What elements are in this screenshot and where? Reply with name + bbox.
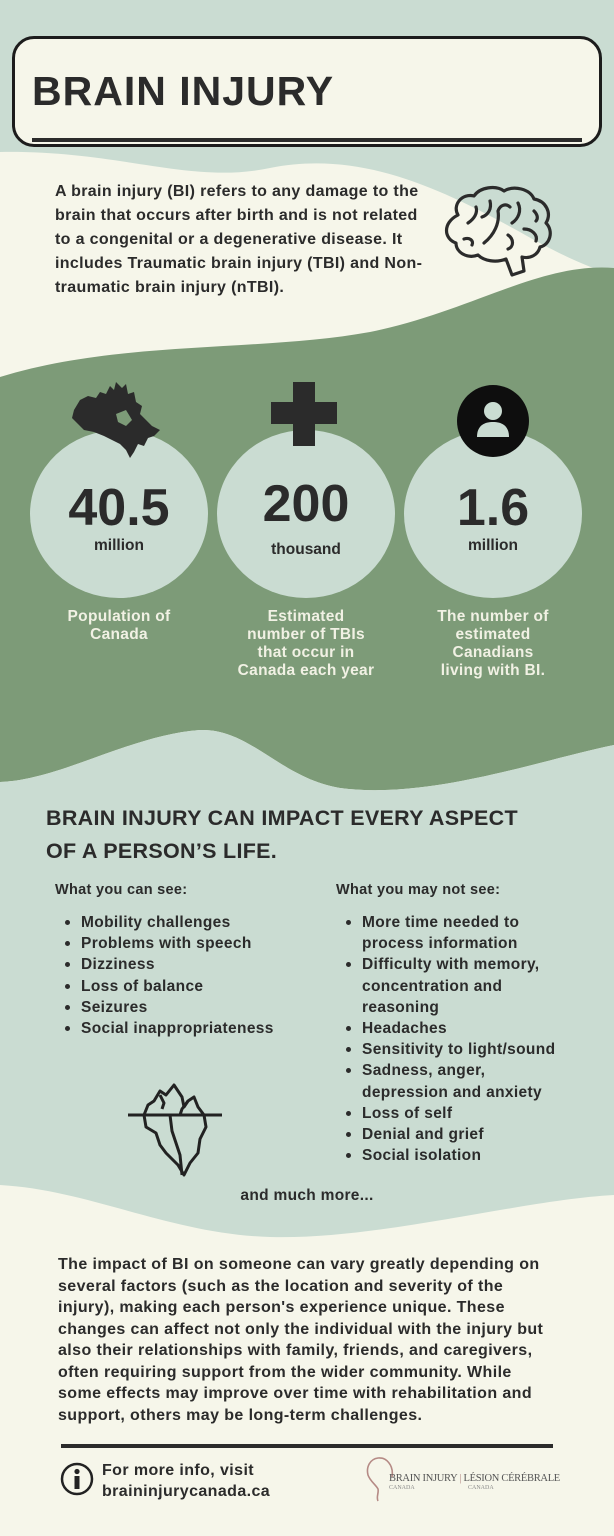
intro text: to a congenital or a degenerative disease. It (55, 231, 402, 248)
icon: canada map (72, 382, 160, 458)
section heading: BRAIN INJURY CAN IMPACT EVERY ASPECT (46, 806, 518, 830)
logo: CANADA (389, 1485, 415, 1491)
stat: living with BI: million (468, 537, 518, 554)
list: what you can see: Dizziness (81, 956, 155, 973)
footer info: braininjurycanada.ca (102, 1483, 270, 1500)
icon: plus (271, 382, 337, 446)
stat: TBIs: that occur in (258, 644, 354, 661)
stat: TBIs (217, 382, 395, 679)
icon: brain (444, 186, 552, 277)
list: what you can see: Mobility challenges (81, 914, 231, 931)
closing paragraph: often requiring support from the wider community. While (58, 1364, 512, 1380)
icon: person (457, 385, 529, 457)
title box (12, 36, 602, 147)
closing paragraph: support, others may be long-term challenges. (58, 1406, 422, 1424)
icon: iceberg (128, 1083, 222, 1177)
list: what you may not see: process information (362, 935, 518, 952)
list: what you can see: Problems with speech (81, 935, 252, 952)
list: what you may not see: Difficulty with memory, (362, 956, 539, 973)
number: 40.5 (68, 479, 170, 537)
label: Population of (68, 608, 170, 625)
stat: TBIs: number of TBIs (247, 626, 365, 643)
stat: TBIs: thousand (271, 541, 341, 558)
list: what you may not see: Denial and grief (362, 1126, 484, 1143)
footer info: For more info, visit (102, 1462, 254, 1479)
stat: living with BI: estimated (455, 626, 531, 643)
title: BRAIN INJURY (32, 68, 334, 114)
list: what you can see: What you can see: (55, 882, 187, 898)
list: what you may not see: More time needed to (362, 914, 519, 931)
closing paragraph (58, 1256, 543, 1424)
logo: BRAIN INJURY | LÉSION CÉRÉBRALE (389, 1473, 560, 1484)
stat: living with BI: 1.6 (457, 479, 529, 537)
intro text: traumatic brain injury (nTBI). (55, 279, 284, 296)
stat: population: million (94, 537, 144, 554)
logo (366, 1457, 560, 1502)
list: what you may not see: concentration and (362, 978, 502, 995)
stat: living with BI: Canadians (452, 644, 534, 661)
section heading (46, 806, 518, 863)
list: what you may not see: What you may not see: (336, 882, 500, 898)
closing paragraph: The impact of BI on someone can vary greatly depending on (58, 1256, 540, 1273)
list: what you may not see: depression and anxiety (362, 1084, 542, 1101)
closing paragraph: injury), making each person's experience unique. These (58, 1299, 505, 1316)
closing paragraph: changes can affect not only the individual with the injury but (58, 1320, 543, 1338)
intro text (55, 183, 422, 296)
list: what you may not see: Social isolation (362, 1147, 481, 1164)
closing paragraph: also their relationships with family, friends, and caregivers, (58, 1342, 532, 1359)
stat: living with BI: living with BI. (441, 662, 545, 679)
intro text: includes Traumatic brain injury (TBI) and Non- (55, 255, 422, 272)
stat: TBIs: 200 (263, 475, 349, 533)
list: what you may not see: Loss of self (362, 1105, 452, 1122)
logo: CANADA (468, 1485, 494, 1491)
stat: TBIs: Estimated (268, 608, 344, 625)
list: what you can see: Loss of balance (81, 978, 203, 995)
closing paragraph: some effects may improve over time with rehabilitation and (58, 1385, 532, 1402)
list: what you may not see (336, 882, 555, 1164)
list: what you may not see: Headaches (362, 1020, 447, 1037)
label (68, 608, 170, 643)
list: what you may not see: Sensitivity to light/sound (362, 1041, 555, 1058)
intro text: A brain injury (BI) refers to any damage to the (55, 183, 418, 200)
stat: population (30, 382, 208, 643)
list: what you may not see: Sadness, anger, (362, 1062, 485, 1079)
closing paragraph: several factors (such as the location and severity of the (58, 1278, 503, 1294)
label: Canada (90, 626, 148, 643)
section heading: OF A PERSON’S LIFE. (46, 839, 277, 863)
icon: info (60, 1462, 94, 1496)
stat: living with BI: The number of (437, 608, 549, 625)
stat: living with BI (404, 385, 582, 679)
and much more: and much more... (240, 1187, 374, 1204)
list: what you can see (55, 882, 274, 1037)
list: what you may not see: reasoning (362, 999, 439, 1016)
list: what you can see: Seizures (81, 999, 148, 1016)
list: what you can see: Social inappropriateness (81, 1020, 274, 1037)
intro text: brain that occurs after birth and is not related (55, 207, 418, 224)
footer info (60, 1462, 270, 1500)
stat: TBIs: Canada each year (238, 662, 374, 679)
